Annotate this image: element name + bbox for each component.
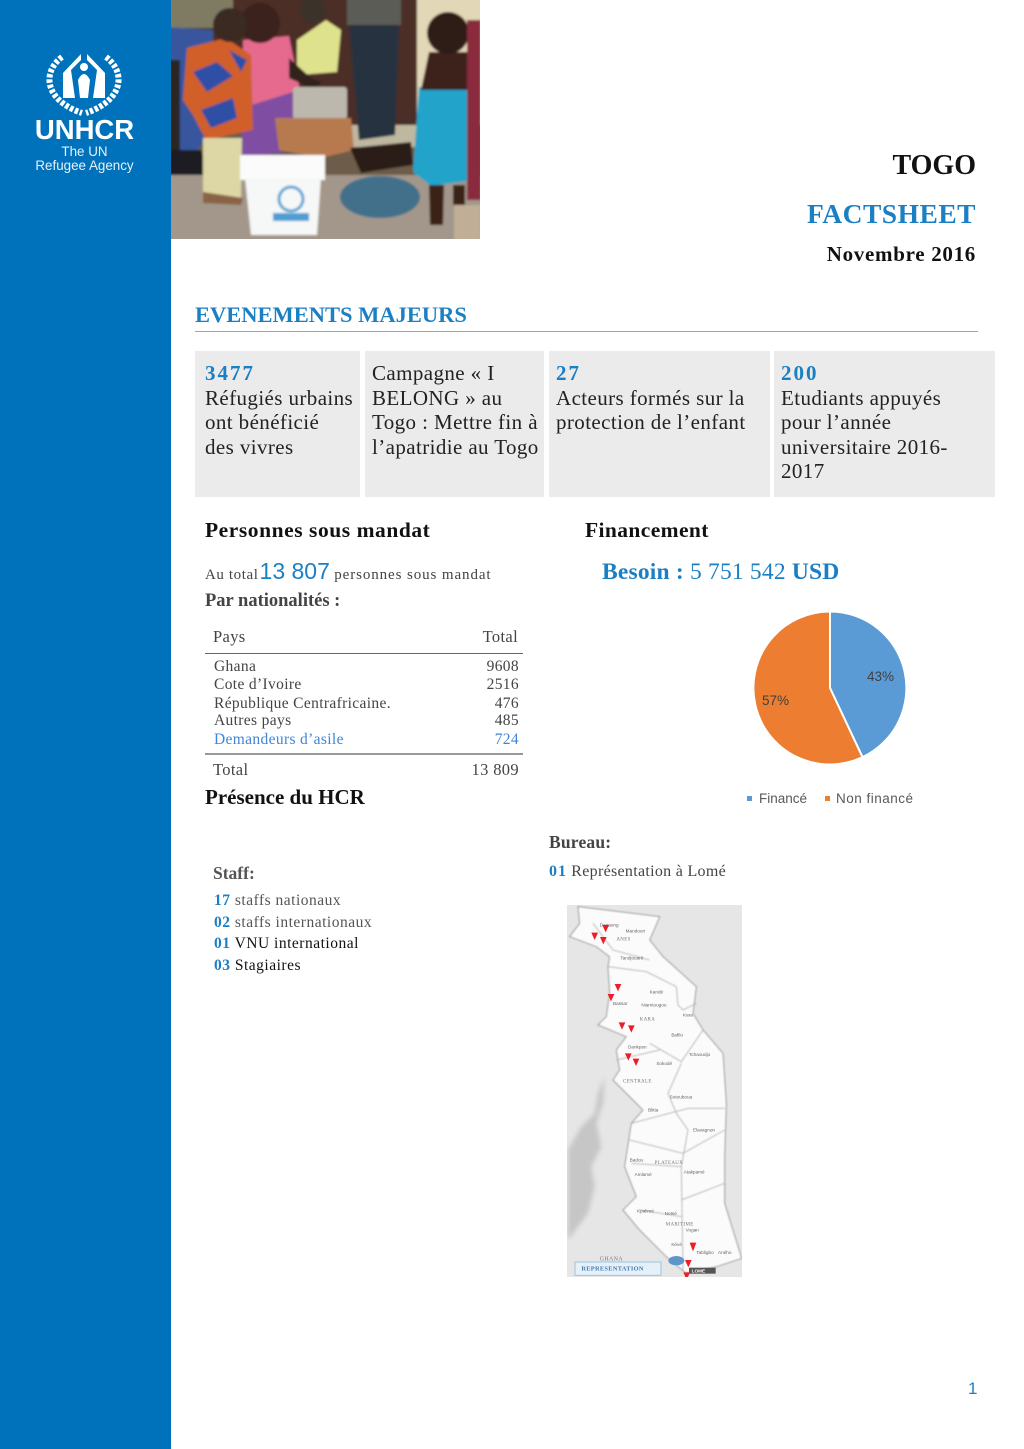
map: Togo with HCR locations: Bafilo	[671, 1033, 683, 1038]
map: Togo with HCR locations: Kandé	[650, 989, 664, 994]
pie chart: funding: Financé	[759, 791, 807, 806]
pie chart: funding: Non financé	[836, 791, 913, 806]
card: 3477: 3477	[205, 361, 255, 385]
map: Togo with HCR locations: Elavagnon	[693, 1128, 715, 1133]
card: campagne: l’apatridie au Togo	[372, 434, 539, 458]
map: Togo with HCR locations: Kpalimé	[637, 1209, 654, 1214]
table: population by nationality: Demandeurs d’asile	[214, 731, 344, 748]
table: population by nationality: République Centrafricaine.	[214, 695, 391, 712]
map: Togo with HCR locations: KARA	[640, 1018, 655, 1023]
table: population by nationality: Ghana	[214, 658, 256, 675]
card: 200: Etudiants appuyés	[781, 386, 941, 410]
table: population by nationality: Pays	[213, 627, 246, 646]
staff list: 01 VNU international	[214, 935, 359, 952]
card: campagne: BELONG » au	[372, 386, 502, 410]
staff list: 03 Stagiaires	[214, 956, 301, 974]
card: 27: Acteurs formés sur la	[556, 386, 745, 410]
table: population by nationality: 13 809	[472, 760, 519, 779]
card: 200	[774, 351, 995, 497]
map: Togo with HCR locations: Bassar	[613, 1001, 628, 1006]
map: Togo with HCR locations: Sotouboua	[670, 1094, 693, 1099]
map: Togo with HCR locations: GHANA	[600, 1257, 623, 1263]
card: 3477: des vivres	[205, 434, 294, 458]
page number: 1	[968, 1379, 977, 1398]
card: 3477	[195, 351, 360, 497]
card: 27	[549, 351, 770, 497]
panel: key events	[195, 351, 995, 497]
table: population by nationality: Total	[483, 627, 518, 646]
card: 200: 2017	[781, 459, 825, 483]
staff list: 17 staffs nationaux	[214, 892, 341, 909]
map: Togo with HCR locations: Badou	[630, 1158, 644, 1163]
card: campagne: Campagne « I	[372, 361, 495, 385]
card: 200: pour l’année	[781, 410, 891, 434]
heading: financement: Financement	[585, 518, 709, 542]
card: 200: 200	[781, 361, 818, 385]
subheading: staff: Staff:	[213, 863, 255, 883]
photo: family with UNHCR bucket	[171, 0, 480, 239]
map: Togo with HCR locations: Blitta	[648, 1108, 659, 1113]
map: Togo with HCR locations: Tandjouaré	[620, 955, 644, 960]
card: 200: universitaire 2016-	[781, 434, 948, 458]
table: population by nationality: 9608	[487, 658, 519, 675]
map: Togo with HCR locations: Notsé	[665, 1211, 677, 1216]
pie chart: funding: 57%	[762, 693, 789, 708]
label: representation: REPRESENTATION	[581, 1265, 644, 1272]
table: population by nationality: Autres pays	[214, 712, 291, 729]
logo: UNHCR	[35, 54, 134, 173]
map: Togo with HCR locations: ANES	[616, 938, 631, 943]
map: Togo with HCR locations: Tchaoudjo	[689, 1052, 711, 1057]
map: Togo with HCR locations: Dapaong	[600, 923, 619, 928]
title: Togo: TOGO	[892, 150, 976, 181]
table: population by nationality: 485	[495, 712, 519, 729]
subheading: par nationalites: Par nationalités :	[205, 591, 340, 611]
map: Togo with HCR locations: Sokodé	[656, 1061, 673, 1066]
bureau line: 01 Représentation à Lomé	[549, 863, 726, 880]
table: population by nationality	[205, 627, 523, 779]
heading: personnes sous mandat: Personnes sous mandat	[205, 518, 430, 542]
total persons: Au total13 807 personnes sous mandat	[205, 558, 491, 584]
map: Togo with HCR locations: Kara	[683, 1013, 693, 1018]
map: Togo with HCR locations: Niamtougou	[641, 1003, 667, 1008]
heading: presence du HCR: Présence du HCR	[205, 785, 365, 809]
pie chart: funding: 43%	[867, 669, 894, 684]
location markers	[591, 925, 696, 1280]
map: Togo with HCR locations	[567, 905, 742, 1277]
staff list	[214, 892, 372, 974]
map: Togo with HCR locations: Amlamé	[635, 1172, 652, 1177]
table: population by nationality: 2516	[487, 676, 519, 693]
title block	[807, 150, 976, 266]
map: Togo with HCR locations: Aného	[718, 1250, 732, 1255]
card: 27: protection de l’enfant	[556, 410, 746, 434]
table: population by nationality: 476	[495, 695, 519, 712]
staff list: 02 staffs internationaux	[214, 914, 372, 930]
map: Togo with HCR locations: Kévé	[671, 1242, 682, 1247]
date: Novembre 2016	[827, 242, 976, 266]
sidebar	[0, 0, 171, 1449]
heading: evenements majeurs: EVENEMENTS MAJEURS	[195, 302, 467, 327]
card: 3477: Réfugiés urbains	[205, 386, 353, 410]
card: 3477: ont bénéficié	[205, 410, 319, 434]
funding need: Besoin : 5 751 542 USD	[602, 559, 839, 585]
table: population by nationality: 724	[495, 731, 519, 748]
title: Factsheet: FACTSHEET	[807, 198, 976, 229]
card: campagne	[365, 351, 544, 497]
map: Togo with HCR locations: Dankpen	[628, 1044, 647, 1049]
map: Togo with HCR locations: Tabligbo	[696, 1250, 714, 1255]
card: 27: 27	[556, 361, 581, 385]
map: Togo with HCR locations: MARITIME	[666, 1222, 694, 1227]
logo: UNHCR: The UN	[61, 144, 108, 159]
label: representation	[575, 1262, 661, 1275]
map: Togo with HCR locations: Atakpamé	[684, 1169, 705, 1174]
map: Togo with HCR locations: CENTRALE	[623, 1080, 652, 1085]
map: Togo with HCR locations: Mandouri	[626, 929, 645, 934]
logo: UNHCR: UNHCR	[35, 114, 134, 145]
logo: UNHCR: Refugee Agency	[35, 158, 134, 173]
table: population by nationality: Cote d’Ivoire	[214, 676, 302, 693]
subheading: bureau: Bureau:	[549, 832, 611, 852]
pie chart: funding	[747, 612, 913, 806]
map: Togo with HCR locations: PLATEAUX	[655, 1161, 683, 1166]
map: Togo with HCR locations: LOME	[692, 1268, 705, 1273]
card: campagne: Togo : Mettre fin à	[372, 410, 538, 434]
table: population by nationality: Total	[213, 760, 248, 779]
map: Togo with HCR locations: Vogan	[686, 1228, 699, 1233]
